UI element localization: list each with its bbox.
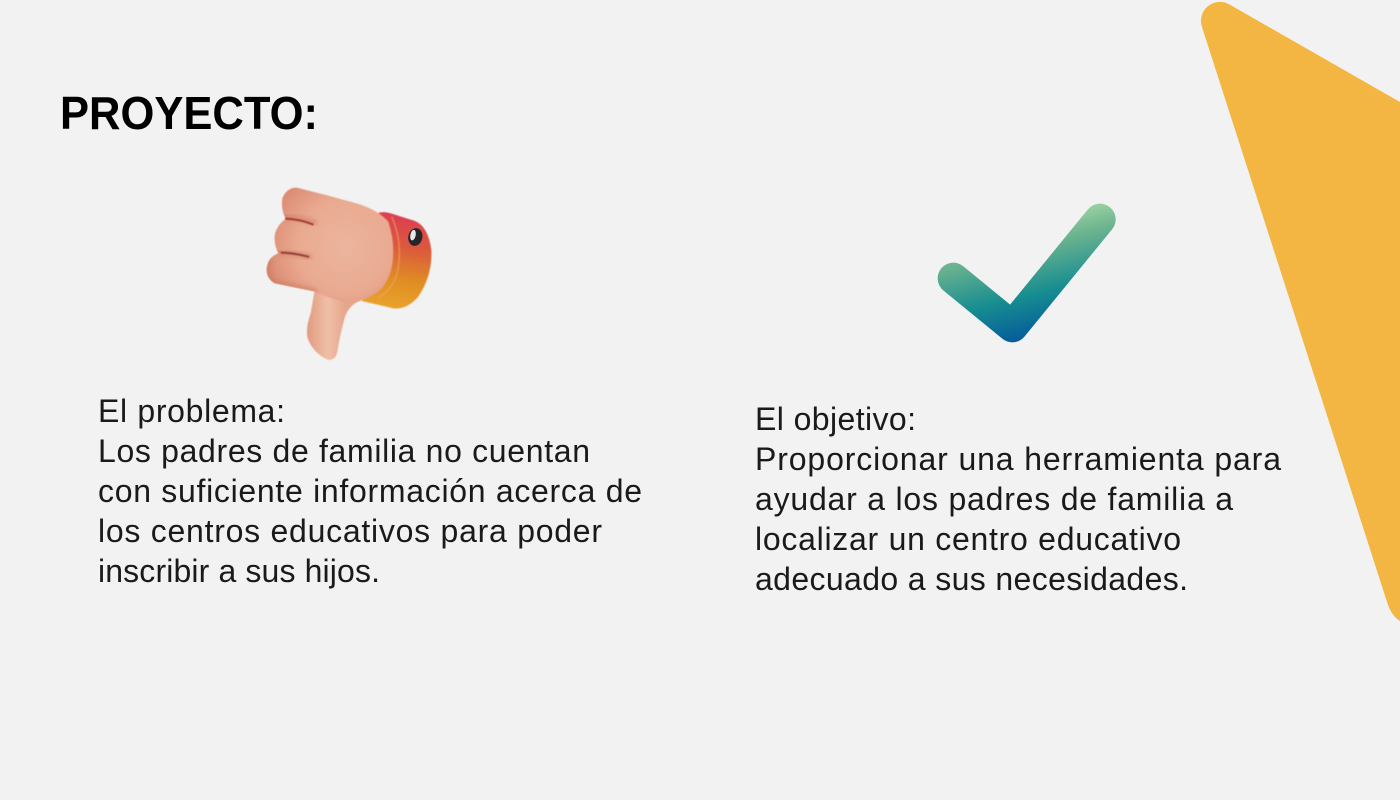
- text block: problem: los centros educativos para poder: [98, 513, 602, 549]
- text block: objective: Proporcionar una herramienta para: [755, 441, 1281, 477]
- text block: objective: adecuado a sus necesidades.: [755, 561, 1188, 597]
- text block: objective: ayudar a los padres de familia a: [755, 481, 1233, 517]
- hand cuff: [362, 212, 431, 309]
- text block: objective: [755, 401, 1281, 597]
- cuff rivet: [407, 227, 424, 247]
- cuff rim highlight: [378, 217, 399, 298]
- finger creases: [282, 219, 313, 257]
- icon: check mark: [953, 219, 1100, 327]
- text block: problem: con suficiente información acerca de: [98, 473, 642, 509]
- finger shading: [268, 217, 317, 292]
- fist: [267, 188, 393, 303]
- text block: objective: El objetivo:: [755, 401, 916, 437]
- decorative shape: yellow triangle: [1201, 2, 1400, 621]
- thumb: [307, 275, 360, 360]
- text block: problem: Los padres de familia no cuentan: [98, 433, 590, 469]
- text block: objective: localizar un centro educativo: [755, 521, 1181, 557]
- text block: problem: inscribir a sus hijos.: [98, 553, 380, 589]
- title: PROYECTO:: [60, 87, 318, 139]
- icon: thumbs down hand: [267, 188, 431, 360]
- text block: problem: El problema:: [98, 393, 285, 429]
- text block: problem: [98, 393, 642, 589]
